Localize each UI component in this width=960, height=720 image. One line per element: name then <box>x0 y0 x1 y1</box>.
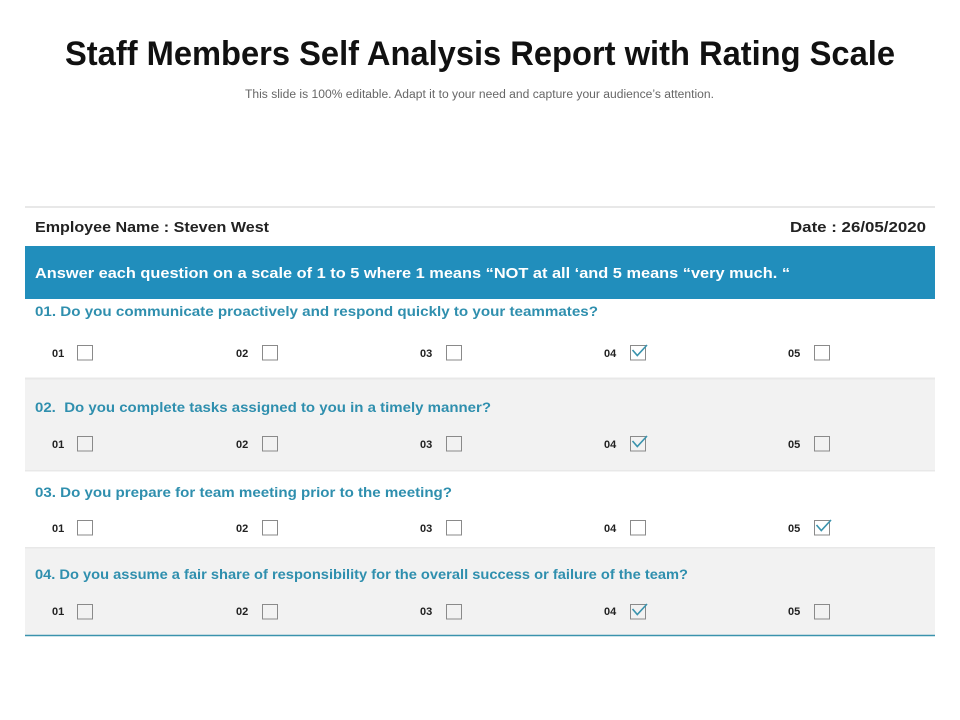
question 3: 03 <box>420 523 432 535</box>
instruction banner <box>25 246 935 299</box>
question 1: 05 <box>788 348 800 360</box>
instruction banner: Answer each question on a scale of 1 to 5 where 1 means “NOT at all ‘and 5 means “very much. “ <box>35 265 790 282</box>
question 1: 01. Do you communicate proactively and respond quickly to your teammates? <box>35 303 598 319</box>
date: Date : 26/05/2020 <box>790 219 926 236</box>
employee name: Employee Name : Steven West <box>35 219 269 236</box>
question 4: 04. Do you assume a fair share of responsibility for the overall success or failure of the team? <box>35 566 688 582</box>
title: Staff Members Self Analysis Report with Rating Scale <box>65 35 895 73</box>
question 3: 05 <box>788 523 800 535</box>
question 2 <box>25 378 935 472</box>
question 2: 05 <box>788 439 800 451</box>
question 3: 02 <box>236 523 248 535</box>
question 2: 01 <box>52 439 64 451</box>
question 4 <box>25 547 935 636</box>
subtitle: This slide is 100% editable. Adapt it to your need and capture your audience’s attention. <box>245 89 714 101</box>
question 4: 02 <box>236 606 248 618</box>
question 2: 02 <box>236 439 248 451</box>
question 3: 04 <box>604 523 617 535</box>
form table <box>25 206 935 636</box>
question 2: 04 <box>604 439 617 451</box>
employee header row <box>25 206 935 246</box>
question 4: 04 <box>604 606 617 618</box>
question 4: 03 <box>420 606 432 618</box>
question 1: 03 <box>420 348 432 360</box>
question 2: 03 <box>420 439 432 451</box>
question 1 <box>25 299 935 378</box>
question 3: 01 <box>52 523 64 535</box>
question 1: 01 <box>52 348 64 360</box>
question 1: 04 <box>604 348 617 360</box>
question 3: 03. Do you prepare for team meeting prior to the meeting? <box>35 484 452 500</box>
question 2: 02. Do you complete tasks assigned to you in a timely manner? <box>35 399 491 415</box>
question 1: 02 <box>236 348 248 360</box>
question 4: 01 <box>52 606 64 618</box>
question 3 <box>25 472 935 548</box>
question 4: 05 <box>788 606 800 618</box>
